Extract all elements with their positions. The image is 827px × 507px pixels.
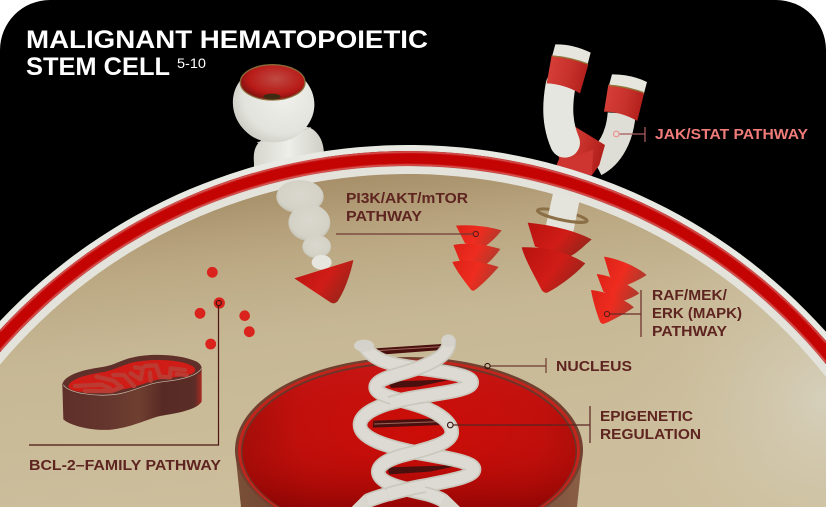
label: PI3K/AKT/mTOR pathway: PATHWAY xyxy=(346,209,422,225)
label: PI3K/AKT/mTOR pathway xyxy=(336,191,478,237)
title: 5-10 xyxy=(177,55,206,71)
label: RAF/MEK/ERK pathway: PATHWAY xyxy=(652,324,727,340)
red dots: BCL-2 family proteins xyxy=(195,267,255,349)
label: epigenetic regulation: REGULATION xyxy=(600,427,701,443)
label: RAF/MEK/ERK pathway: RAF/MEK/ xyxy=(652,288,727,304)
label: PI3K/AKT/mTOR pathway: PI3K/AKT/mTOR xyxy=(346,191,469,207)
DNA strand end caps xyxy=(354,334,455,352)
label: epigenetic regulation: EPIGENETIC xyxy=(600,409,694,425)
label: nucleus: NUCLEUS xyxy=(556,359,632,375)
label: RAF/MEK/ERK pathway: ERK (MAPK) xyxy=(652,306,742,322)
PI3K/AKT/mTOR cones xyxy=(452,225,502,291)
DNA rungs xyxy=(373,344,462,474)
receptor: left intracellular segmented stem and cone xyxy=(276,180,353,303)
DNA strand two xyxy=(376,340,460,507)
mitochondrion xyxy=(62,355,202,430)
DNA strand one overlap segments xyxy=(388,396,427,494)
DNA double helix xyxy=(352,334,474,507)
label: BCL-2 family pathway xyxy=(29,300,221,474)
title: STEM CELL xyxy=(26,53,170,81)
label: epigenetic regulation xyxy=(448,406,701,443)
DNA strand one xyxy=(352,347,474,507)
label: JAK/STAT pathway: JAK/STAT PATHWAY xyxy=(655,127,808,143)
cell membrane xyxy=(0,145,826,377)
title xyxy=(26,30,428,75)
RAF/MEK/ERK cones xyxy=(591,257,647,324)
receptor: left exterior sphere with cup xyxy=(233,65,324,177)
label: nucleus xyxy=(484,358,632,373)
nucleus xyxy=(235,357,583,507)
receptor: JAK/STAT intracellular stem, ring and cones xyxy=(522,193,592,293)
label: RAF/MEK/ERK pathway xyxy=(604,288,742,340)
receptor: JAK/STAT exterior Y shape xyxy=(547,44,647,176)
cell interior cytoplasm xyxy=(0,172,826,507)
label: BCL-2 family pathway: BCL-2–FAMILY PATHWAY xyxy=(29,458,221,474)
black background panel xyxy=(0,0,826,364)
title: MALIGNANT HEMATOPOIETIC xyxy=(26,26,428,54)
